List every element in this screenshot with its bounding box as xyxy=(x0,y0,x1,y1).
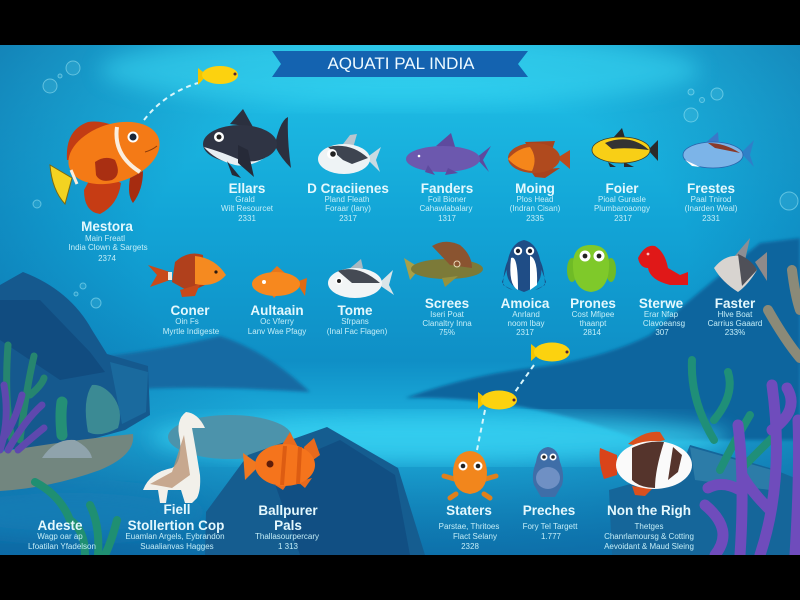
label: Tome: (Inal Fac Flagen) xyxy=(327,327,388,336)
label: Screes: Clanaltry Inna xyxy=(422,319,472,328)
label: Prones: Cost Mfipee xyxy=(572,310,615,319)
panel: Fanders purple fish xyxy=(406,133,491,175)
label: Mestora: India Clown & Sargets xyxy=(68,243,148,252)
bubbles xyxy=(33,61,798,308)
label: Mestora: 2374 xyxy=(98,254,116,263)
label: Frestes: (Inarden Weal) xyxy=(685,204,738,213)
label: Staters: Flact Selany xyxy=(453,532,497,541)
label: D Craciienes: 2317 xyxy=(339,214,357,223)
label: Screes: Iseri Poat xyxy=(430,310,465,319)
label: Mestora xyxy=(68,219,148,263)
label: Aultaain: Oc Vferry xyxy=(260,317,294,326)
label: Adeste: Wagp oar ap xyxy=(37,532,83,541)
label: Moing: (Indran Cisan) xyxy=(510,204,561,213)
label: Tome: Sfrpans xyxy=(341,317,369,326)
label: Coner xyxy=(163,303,220,336)
panel: D Craciienes fish xyxy=(318,134,381,174)
label: Non the Righ: Chanrlamoursg & Cotting xyxy=(604,532,694,541)
left rock with coral and sand xyxy=(0,272,150,491)
label: Amoica: noom lbay xyxy=(508,319,544,328)
label: Faster: 233% xyxy=(725,328,745,337)
label: Ellars: Ellars xyxy=(229,181,265,196)
label: Ellars: Grald xyxy=(235,195,255,204)
label: Sterwe xyxy=(639,296,685,337)
label: Sterwe: Sterwe xyxy=(639,296,684,311)
label: Frestes: 2331 xyxy=(702,214,720,223)
label: Amoica: Anrland xyxy=(512,310,540,319)
label: Sterwe: 307 xyxy=(655,328,669,337)
panel: Tome fish xyxy=(328,259,394,298)
label: Fanders: Cahawlabalary xyxy=(420,204,472,213)
panel: Mestora clownfish xyxy=(50,111,168,214)
label: Prones: 2814 xyxy=(583,328,601,337)
label: Fanders: 1317 xyxy=(438,214,456,223)
label: Screes: Screes xyxy=(425,296,469,311)
seaweed bottom left xyxy=(35,482,117,555)
panel: Coner fish xyxy=(148,254,226,297)
label: Ballpurer Pals xyxy=(255,503,319,551)
label: Amoica xyxy=(501,296,550,337)
label: D Craciienes: Pland Fleath xyxy=(325,195,369,204)
label: Mestora: Main Freatl xyxy=(85,234,125,243)
label: D Craciienes xyxy=(307,181,389,223)
label: Fiell Stollertion Cop: Euamlan Argels, Eybrandon xyxy=(125,532,225,541)
panel: Sterwe red creature xyxy=(638,246,688,285)
label: Ellars: Wilt Resourcet xyxy=(221,204,274,213)
label: Moing: Moing xyxy=(515,181,555,196)
panel: Preches blue creature xyxy=(533,447,563,497)
label: Foier: Plumbaroaongy xyxy=(594,204,650,213)
label: Coner: Myrtle Indigeste xyxy=(163,327,220,336)
label: Staters: 2328 xyxy=(461,542,479,551)
label: Frestes: Paal Tnirod xyxy=(691,195,731,204)
panel: Non the Righ clownfish xyxy=(600,432,692,496)
icon: small yellow fish top xyxy=(198,66,238,85)
label: Faster: Faster xyxy=(715,296,756,311)
panel: Moing orange fish xyxy=(508,141,570,178)
label: Tome xyxy=(327,303,388,336)
panel: Aultaain fish xyxy=(252,266,307,298)
label: Non the Righ: Non the Righ xyxy=(607,503,691,518)
label: Staters xyxy=(439,503,499,551)
label: Ballpurer Pals: Thallasourpercary xyxy=(255,532,319,541)
panel: Ballpurer orange fish xyxy=(243,432,320,490)
label: Fanders: Fanders xyxy=(421,181,473,196)
label: Prones xyxy=(570,296,616,337)
label: Coner: Coner xyxy=(170,303,210,318)
title banner: AQUATI PAL INDIA xyxy=(327,54,475,73)
label: Preches xyxy=(523,503,578,541)
dotted arrow paths xyxy=(144,83,534,450)
panel: Prones frog xyxy=(567,245,616,292)
label: Non the Righ: Aevoidant & Maud Sleing xyxy=(604,542,694,551)
label: Screes xyxy=(422,296,472,337)
label: Moing xyxy=(510,181,561,223)
label: Amoica: 2317 xyxy=(516,328,534,337)
label: Preches: Fory Tel Targett xyxy=(523,522,578,531)
label: Coner: Oin Fs xyxy=(175,317,199,326)
label: Aultaain: Aultaain xyxy=(250,303,304,318)
label: Prones: Prones xyxy=(570,296,616,311)
label: Faster: Hlve Boat xyxy=(718,310,753,319)
label: Non the Righ xyxy=(604,503,694,551)
label: Mestora: Mestora xyxy=(81,219,133,234)
label: D Craciienes: Foraar (lany) xyxy=(325,204,371,213)
label: Fanders: Foil Bioner xyxy=(428,195,466,204)
label: Foier xyxy=(594,181,650,223)
label: Foier: Foier xyxy=(605,181,639,196)
label: Moing: Plos Head xyxy=(517,195,553,204)
label: Adeste xyxy=(28,518,96,551)
label: Prones: thaanpt xyxy=(580,319,607,328)
label: Adeste: Adeste xyxy=(37,518,83,533)
label: Tome: Tome xyxy=(337,303,373,318)
label: Ballpurer Pals: 1 313 xyxy=(278,542,299,551)
label: Preches: Preches xyxy=(523,503,575,518)
panel: Screes fish xyxy=(404,242,483,287)
label: Ballpurer Pals: Ballpurer xyxy=(258,503,318,518)
label: Foier: Pioal Gurasle xyxy=(598,195,647,204)
label: Amoica: Amoica xyxy=(501,296,550,311)
label: Foier: 2317 xyxy=(614,214,632,223)
label: Staters: Staters xyxy=(446,503,492,518)
title banner xyxy=(272,51,528,77)
panel: Fiell giraffe creature xyxy=(143,412,205,503)
centre rock xyxy=(205,427,425,555)
label: Fiell Stollertion Cop xyxy=(125,502,225,551)
label: Moing: 2335 xyxy=(526,214,544,223)
label: Ellars: 2331 xyxy=(238,214,256,223)
panel: Frestes blue fish xyxy=(683,132,754,168)
panel: Faster grey fish xyxy=(714,238,767,292)
label: Faster xyxy=(708,296,762,337)
panel: Ellars orca xyxy=(203,109,291,178)
panel: Staters orange creature xyxy=(444,451,496,498)
label: Adeste: Lfoatilan Yfadelson xyxy=(28,542,96,551)
label: Screes: 75% xyxy=(439,328,455,337)
label: Faster: Carrius Gaaard xyxy=(708,319,762,328)
label: Frestes xyxy=(685,181,738,223)
panel: Amoica penguin xyxy=(502,240,546,292)
label: Ballpurer Pals: Pals xyxy=(274,518,302,533)
label: Fiell Stollertion Cop: Fiell xyxy=(163,502,191,517)
icon: yellow fish mid upper xyxy=(531,342,570,362)
label: Non the Righ: Thetges xyxy=(635,522,663,531)
icon: yellow fish mid lower xyxy=(478,390,517,410)
label: Preches: 1.777 xyxy=(541,532,562,541)
label: Fiell Stollertion Cop: Stollertion Cop xyxy=(128,518,224,533)
label: Fiell Stollertion Cop: Suaalianvas Hagges xyxy=(140,542,214,551)
label: Sterwe: Clavoeansg xyxy=(643,319,685,328)
label: Aultaain xyxy=(248,303,306,336)
label: Sterwe: Erar Nfap xyxy=(644,310,679,319)
label: D Craciienes: D Craciienes xyxy=(307,181,389,196)
label: Staters: Parstae, Thritoes xyxy=(439,522,499,531)
label: Aultaain: Lanv Wae Pfagy xyxy=(248,327,306,336)
label: Frestes: Frestes xyxy=(687,181,735,196)
label: Ellars xyxy=(221,181,274,223)
panel: Foier yellow fish xyxy=(592,128,658,167)
label: Fanders xyxy=(420,181,473,223)
right rock and coral xyxy=(609,270,800,555)
